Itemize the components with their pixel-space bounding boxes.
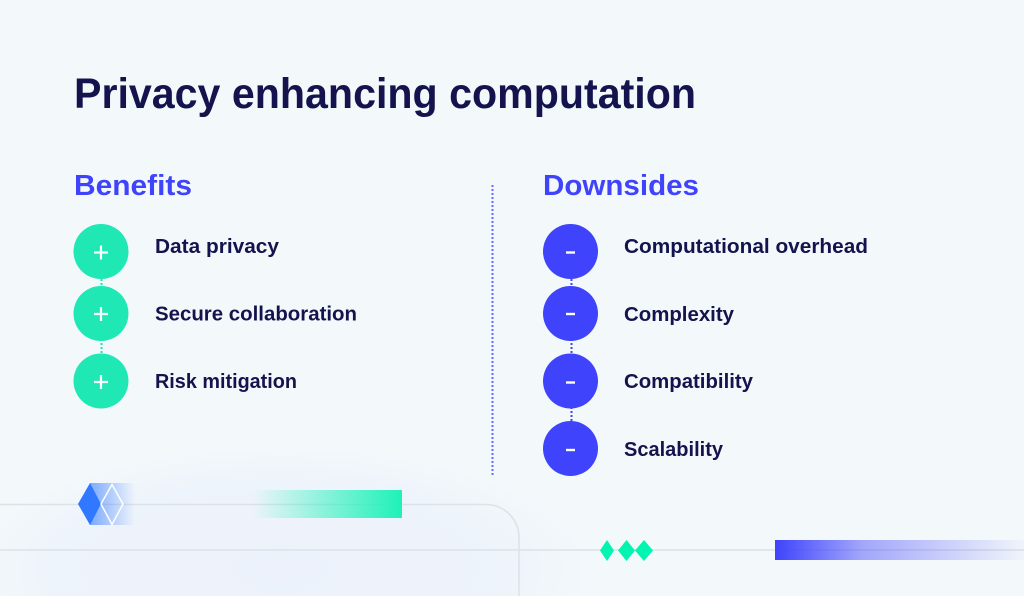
benefit: secure collaboration [74, 286, 357, 341]
benefit: secure collaboration: Secure collaboration [155, 304, 357, 326]
heading: benefits: Benefits [74, 170, 192, 202]
decorative horizontal line [0, 549, 1024, 551]
downside: compatibility [543, 354, 754, 408]
decorative line with rounded corner [0, 504, 519, 596]
benefit: risk mitigation: Risk mitigation [155, 371, 297, 393]
connector dots: benefits [100, 279, 102, 353]
panel: downsides [543, 170, 868, 476]
connector dots: downsides [570, 279, 572, 421]
panel: benefits [74, 170, 357, 408]
icon: three green diamonds [600, 540, 653, 561]
downside: scalability [543, 421, 724, 476]
blue gradient bar [775, 540, 1024, 560]
benefit: risk mitigation [74, 354, 297, 408]
icon: blue hexagon diamonds [78, 483, 135, 525]
downside: complexity [543, 286, 735, 341]
dotted divider [492, 185, 494, 476]
green gradient bar [252, 490, 402, 518]
downside: computational overhead: Computational overhead [624, 236, 868, 258]
downside: complexity: Complexity [624, 304, 735, 326]
downside: compatibility: Compatibility [624, 371, 754, 393]
benefit: data privacy: Data privacy [155, 236, 280, 258]
heading: downsides: Downsides [543, 170, 699, 202]
downside: scalability: Scalability [624, 439, 724, 461]
benefit: data privacy [74, 224, 280, 279]
downside: computational overhead [543, 224, 868, 279]
title: Privacy enhancing computation [74, 70, 696, 118]
